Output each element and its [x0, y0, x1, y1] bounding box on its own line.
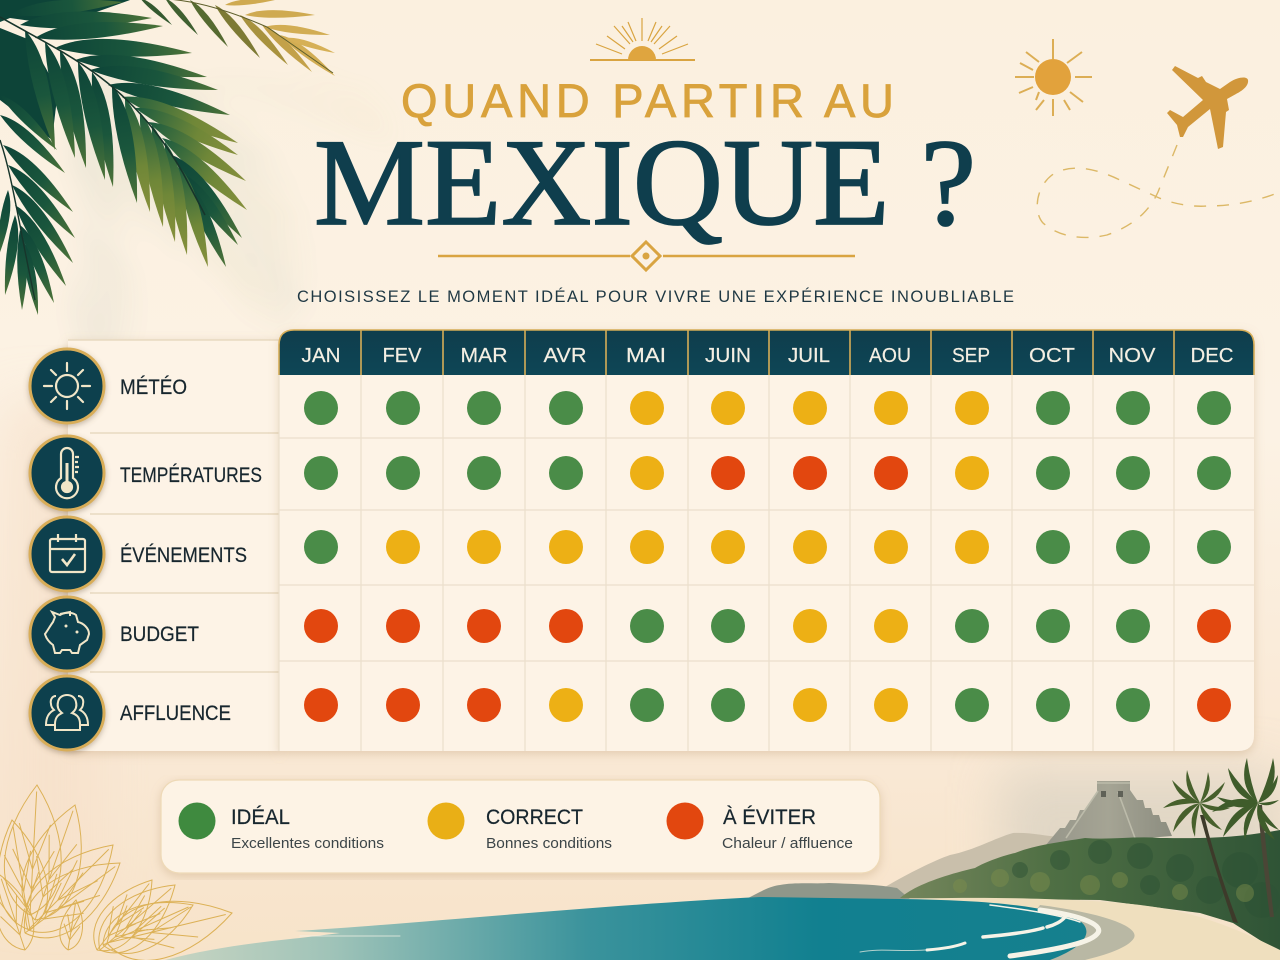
legend: idéal: IDÉAL: [231, 806, 290, 829]
table grid: [279, 375, 1254, 751]
month labels: SEP: [952, 345, 990, 367]
title: quand partir au: QUAND PARTIR AU: [401, 74, 894, 127]
subtitle: CHOISISSEZ LE MOMENT IDÉAL POUR VIVRE UNE EXPÉRIENCE INOUBLIABLE: [297, 287, 1014, 306]
left label panel: [68, 340, 280, 751]
legend panel: [161, 780, 880, 873]
icon: group of people: [30, 676, 104, 750]
legend: idéal: Excellentes conditions: [231, 835, 384, 852]
label: températures: TEMPÉRATURES: [120, 464, 262, 487]
month labels: JAN: [302, 345, 340, 367]
month labels: MAI: [626, 345, 666, 367]
landscape: foam and waves: [300, 905, 1099, 956]
row: météo dots: [304, 391, 1231, 425]
month labels: AVR: [544, 345, 586, 367]
legend: à éviter: Chaleur / affluence: [722, 835, 853, 852]
left peach wash: [0, 400, 100, 900]
month labels: [302, 345, 1234, 367]
title: mexique: MEXIQUE ?: [314, 114, 976, 251]
legend: à éviter: À ÉVITER: [723, 806, 816, 829]
sun icon: [1015, 39, 1092, 116]
landscape: distant hazy hills: [880, 833, 1080, 900]
month labels: FEV: [382, 345, 422, 367]
landscape: beach: [880, 898, 1280, 960]
row: événements dots: [304, 530, 1231, 564]
icon: thermometer: [30, 436, 104, 510]
month labels: DEC: [1190, 345, 1234, 367]
legend: idéal: [178, 802, 384, 852]
horizon haze: [1000, 770, 1280, 890]
landscape: low hill: [746, 883, 910, 899]
landscape: jungle: [900, 830, 1280, 953]
month labels: OCT: [1029, 345, 1075, 367]
month labels: MAR: [460, 345, 508, 367]
legend: correct: CORRECT: [486, 806, 583, 829]
palm tree right: [1210, 758, 1280, 917]
title divider with diamond: [438, 242, 855, 270]
landscape: wet sand: [1000, 905, 1135, 960]
icon: sun: [30, 349, 104, 423]
airplane icon: [1167, 66, 1248, 149]
palm tree left: [1162, 770, 1238, 923]
sunrise emblem: [590, 18, 695, 60]
table header: [279, 330, 1254, 375]
palm fronds: [0, 0, 338, 316]
month labels: AOU: [869, 345, 911, 367]
label: affluence: AFFLUENCE: [120, 702, 231, 725]
dashed flight path: [1037, 145, 1280, 237]
legend: correct: [428, 802, 612, 852]
row: affluence dots: [304, 688, 1231, 722]
icon: calendar: [30, 517, 104, 591]
palm shadow on background: [64, 68, 408, 391]
label: budget: BUDGET: [120, 623, 199, 646]
label: météo: MÉTÉO: [120, 376, 187, 399]
month labels: NOV: [1108, 345, 1156, 367]
icon: piggy bank: [30, 597, 104, 671]
landscape: sea: [165, 897, 1086, 960]
gold line-art leaves: [0, 783, 239, 960]
landscape: pyramid: [1045, 781, 1172, 846]
month labels: JUIN: [705, 345, 751, 367]
label: événements: ÉVÉNEMENTS: [120, 544, 247, 567]
legend: à éviter: [666, 802, 853, 852]
table panel: [279, 330, 1254, 751]
row: températures dots: [304, 456, 1231, 490]
month labels: JUIL: [788, 345, 830, 367]
row: budget dots: [304, 609, 1231, 643]
legend: correct: Bonnes conditions: [486, 835, 612, 852]
